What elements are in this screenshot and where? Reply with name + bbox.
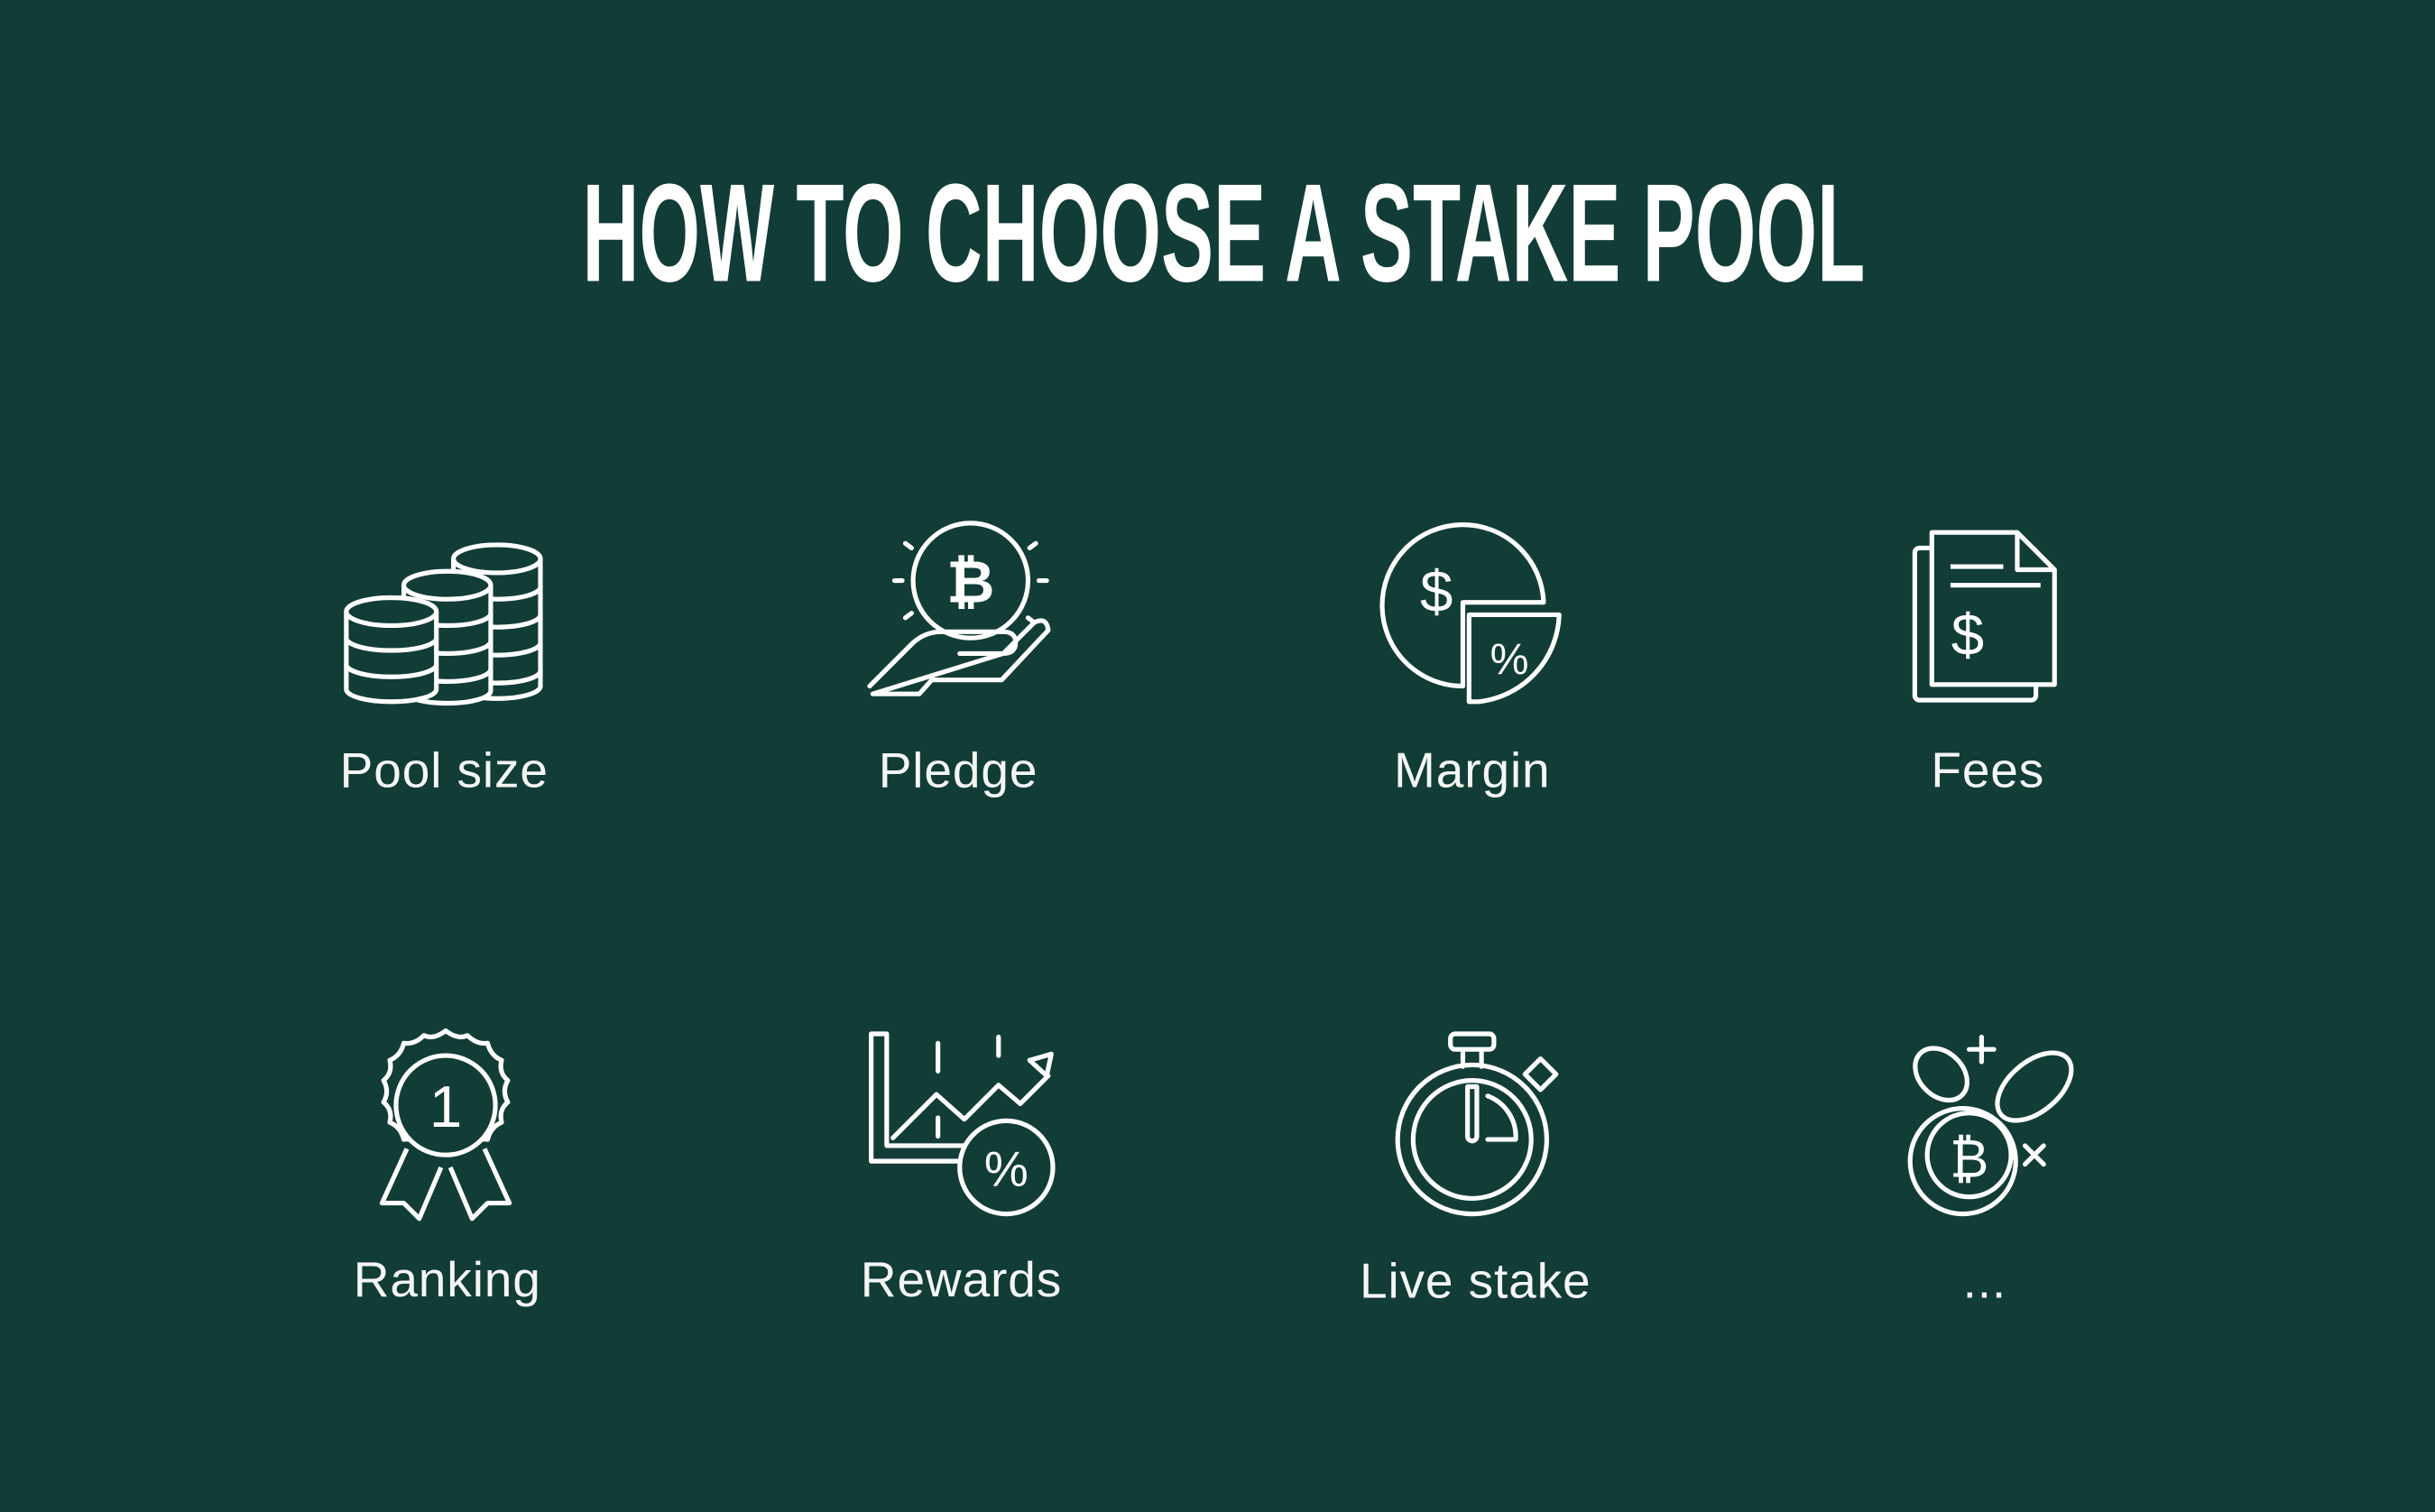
icon: stopwatch: [1397, 1034, 1556, 1214]
label: pool size: Pool size: [340, 742, 549, 797]
icon: pie chart: $: [1420, 558, 1453, 624]
icon: coins: ₿: [1950, 1128, 1988, 1189]
item: ranking: [354, 1031, 541, 1307]
icon: coins: [1905, 1037, 2084, 1214]
label: fees: Fees: [1931, 742, 2044, 797]
item: live stake: [1360, 1034, 1591, 1309]
label: live stake: Live stake: [1360, 1253, 1591, 1309]
item: pool size: [340, 545, 549, 797]
icon: coin stacks: [346, 545, 540, 703]
item: more: [1905, 1037, 2084, 1309]
icon: award badge: [382, 1031, 510, 1219]
label: margin: Margin: [1394, 742, 1551, 797]
icon: documents: $: [1951, 602, 1984, 668]
icon: hand with coin: [870, 523, 1048, 694]
icon: growth chart with percent: [872, 1034, 1053, 1214]
icon: documents: [1914, 532, 2054, 700]
icon: award badge: 1: [429, 1074, 462, 1139]
label: ranking: Ranking: [354, 1251, 541, 1307]
item: rewards: [861, 1034, 1062, 1307]
item: pledge: [870, 523, 1048, 797]
icon: pie chart: %: [1490, 635, 1529, 684]
icon: growth chart with percent: %: [984, 1141, 1028, 1197]
item: margin: [1382, 525, 1559, 797]
label: pledge: Pledge: [879, 742, 1038, 797]
item: fees: [1914, 532, 2054, 797]
icon: hand with coin: ₿: [946, 549, 994, 617]
icon: pie chart: [1382, 525, 1559, 702]
label: more: ...: [1963, 1253, 2006, 1309]
label: rewards: Rewards: [861, 1251, 1062, 1307]
